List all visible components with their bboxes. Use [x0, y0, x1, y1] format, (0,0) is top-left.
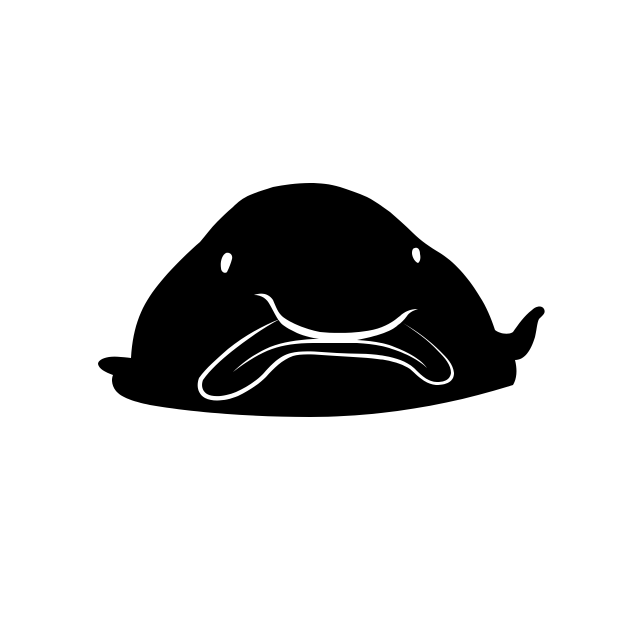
- icon: right eye: [412, 248, 420, 263]
- mouth crease: [254, 294, 418, 341]
- icon: left eye: [221, 253, 232, 273]
- lip inner line: [233, 339, 427, 372]
- tongue-like lower lip outline: [198, 319, 454, 400]
- body silhouette with fins: [98, 183, 545, 417]
- blobfish illustration: [98, 183, 545, 417]
